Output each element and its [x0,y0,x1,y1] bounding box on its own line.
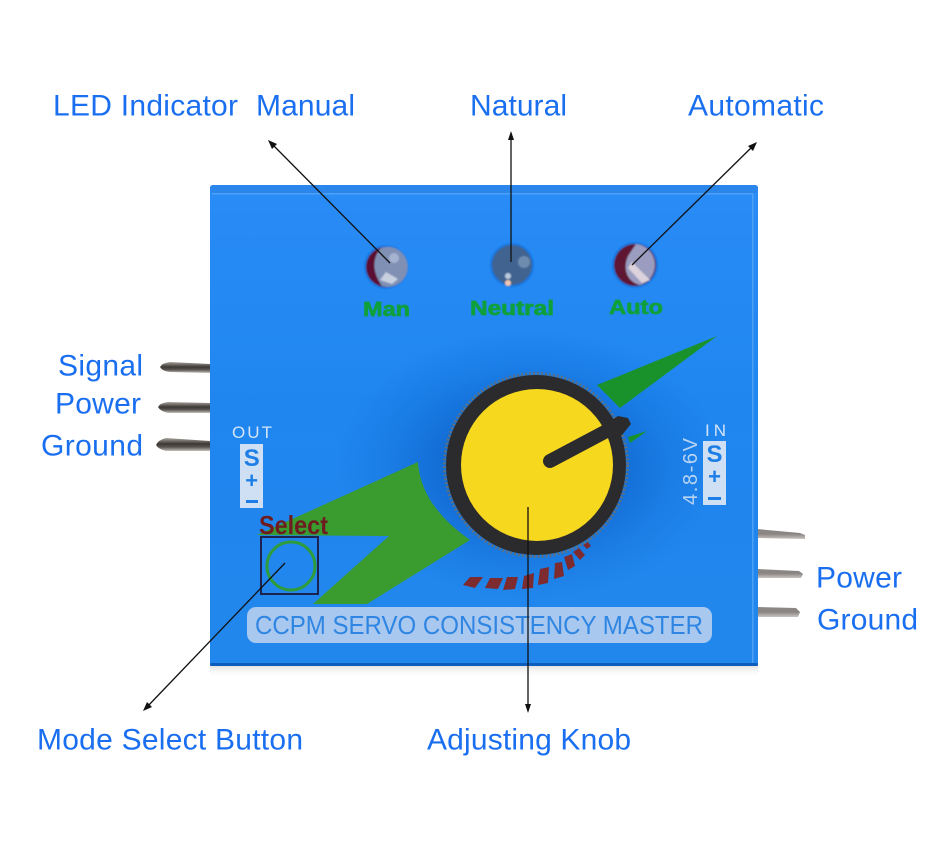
red level arc [463,542,591,590]
arrow: LED neutral [508,131,514,262]
LED: manual [364,245,408,289]
select button [259,510,328,594]
label: Ground, input: Ground [817,604,918,636]
green lightning graphic: lower shape [257,462,470,604]
arrow: adjusting knob [525,507,531,713]
IN header marking: S [706,441,723,468]
LED captions: Man [363,299,410,321]
arrow: LED manual [268,140,390,263]
adjusting knob [444,374,631,556]
knob shadow [335,330,725,600]
label: Power, output: Power [55,388,141,420]
left output pins [156,362,210,451]
green lightning graphic: upper streak [597,336,717,443]
IN header marking: + [708,464,721,489]
label: Natural: Natural [470,90,567,122]
label: Signal: Signal [58,350,143,382]
arrow: mode select button [143,563,285,711]
label: Power, input: Power [816,562,902,594]
LED: auto [612,242,658,288]
OUT header marking: + [245,468,258,493]
label: Automatic: Automatic [688,90,824,122]
board shadow [210,666,758,678]
label: Ground, output: Ground [41,430,143,462]
right input pins [757,529,805,617]
LED captions: Auto [609,297,663,319]
select button: Select [259,510,328,540]
IN header marking: 4.8-6V [680,437,702,505]
arrow: LED automatic [632,142,757,265]
LED: neutral [490,243,534,287]
product name strip: CCPM SERVO CONSISTENCY MASTER [255,610,703,640]
label: LED Indicator: LED Indicator [53,90,238,122]
LED captions [363,297,663,321]
label: Manual: Manual [256,90,355,122]
OUT header marking [232,423,272,508]
IN header marking: IN [705,421,726,440]
IN header marking [680,421,726,505]
label: Mode Select Button: Mode Select Button [37,724,303,756]
OUT header marking: OUT [232,423,272,442]
label: Adjusting Knob: Adjusting Knob [427,724,631,756]
LED captions: Neutral [470,298,554,320]
OUT header marking: S [244,445,260,472]
panel: blue circuit board [210,185,758,666]
